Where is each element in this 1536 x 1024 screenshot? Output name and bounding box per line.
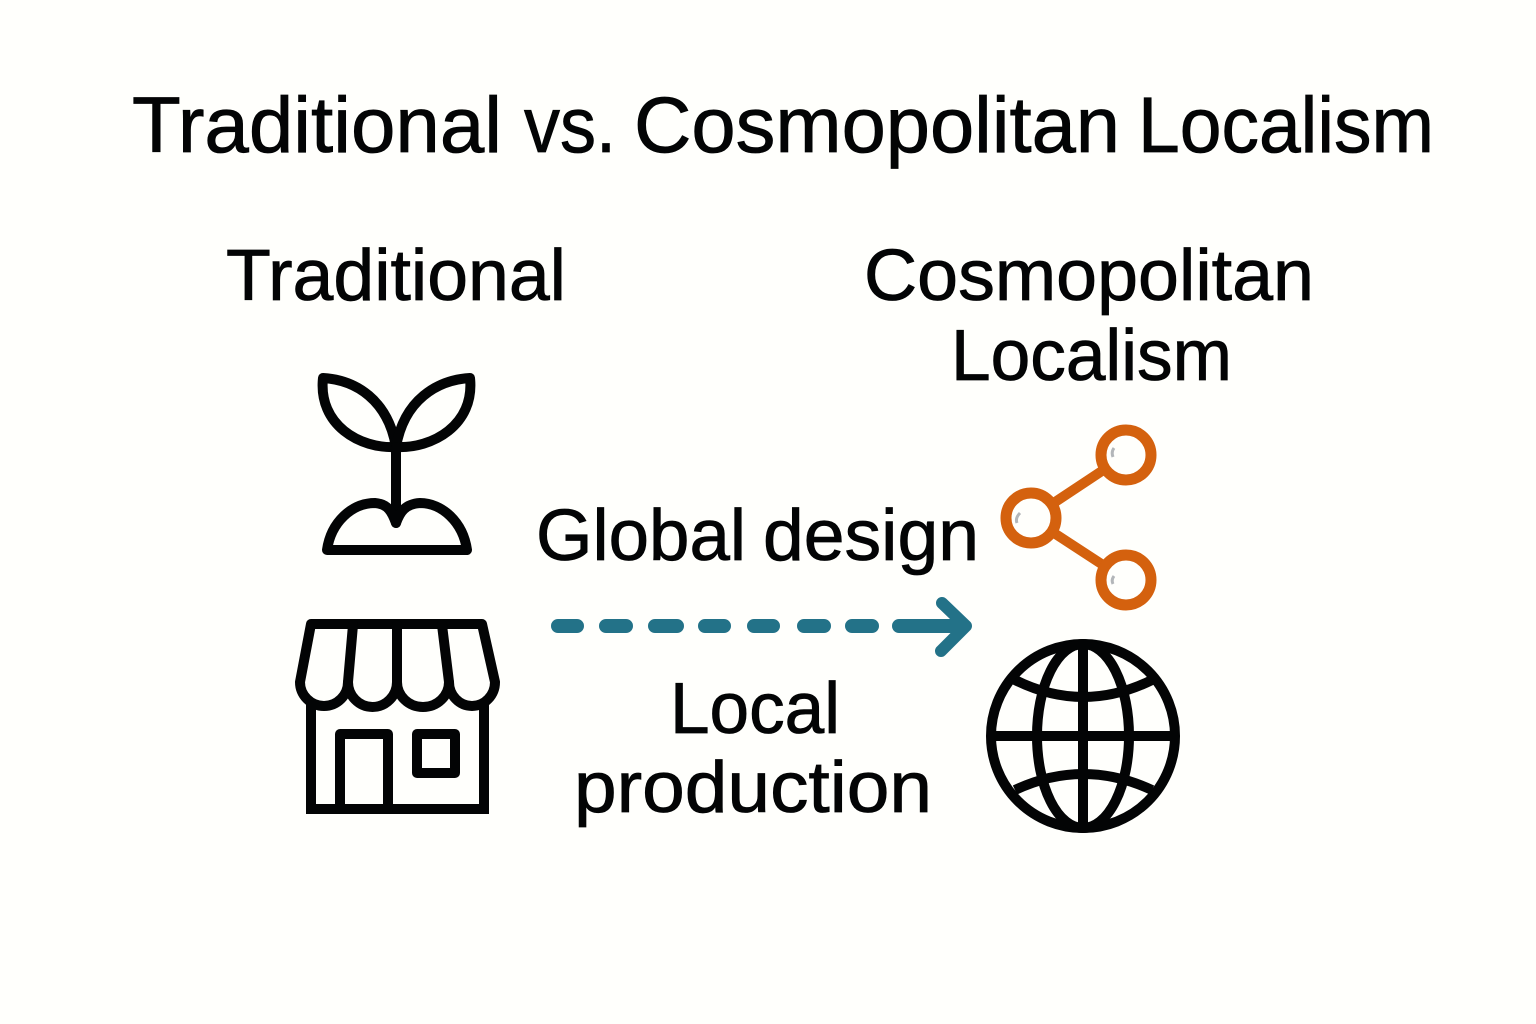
icon: storefront [300, 624, 495, 809]
heading: cosmopolitan localism [864, 236, 1314, 396]
label: global design: design [763, 496, 979, 576]
label: local production: production [574, 748, 932, 828]
label: local production [574, 669, 932, 828]
title: Cosmopolitan [634, 80, 1120, 169]
heading: cosmopolitan localism: Localism [951, 316, 1232, 396]
arrow: dashed teal [558, 603, 966, 651]
label: global design [536, 496, 979, 576]
title: Traditional [132, 80, 502, 169]
icon: sprout [323, 378, 470, 550]
icon: network share [1006, 430, 1151, 605]
title: Localism [1138, 80, 1434, 169]
heading: cosmopolitan localism: Cosmopolitan [864, 236, 1314, 316]
heading: traditional: Traditional [226, 236, 566, 316]
icon: globe [991, 644, 1175, 828]
label: global design: Global [536, 496, 746, 576]
title: vs. [524, 80, 616, 169]
label: local production: Local [670, 669, 840, 749]
title [132, 80, 1434, 169]
